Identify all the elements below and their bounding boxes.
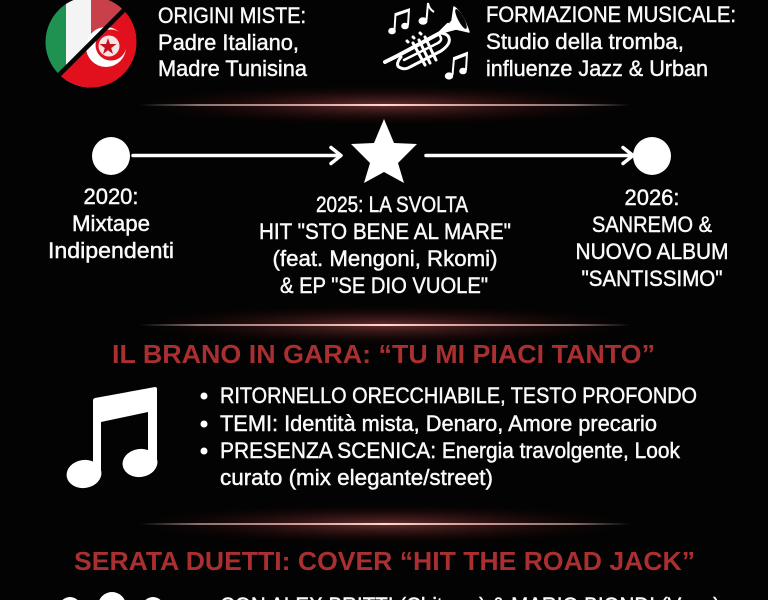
text: origini miste bbox=[158, 3, 308, 81]
timeline text: 2020: 2020: bbox=[84, 184, 138, 209]
text: formazione musicale: FORMAZIONE MUSICALE: bbox=[486, 2, 736, 27]
trumpet body bbox=[385, 7, 469, 69]
text: origini miste: Padre Italiano, bbox=[158, 30, 299, 55]
text: formazione musicale bbox=[486, 2, 736, 81]
divider: lower bbox=[135, 504, 635, 544]
timeline text: 2026: 2026: bbox=[624, 185, 680, 210]
icon: music note bbox=[65, 387, 159, 490]
timeline text: 2025: & EP "SE DIO VUOLE" bbox=[280, 273, 488, 298]
timeline text: 2026: "SANTISSIMO" bbox=[582, 266, 722, 291]
text: formazione musicale: Studio della tromba, bbox=[486, 29, 684, 54]
note left bbox=[388, 10, 409, 34]
timeline node: 2020 bbox=[92, 137, 130, 175]
text: origini miste: ORIGINI MISTE: bbox=[158, 3, 306, 28]
note right bbox=[445, 53, 467, 80]
bullet list: brano: RITORNELLO ORECCHIABILE, TESTO PROFONDO bbox=[220, 383, 697, 408]
timeline text: 2025: (feat. Mengoni, Rkomi) bbox=[272, 246, 498, 271]
divider: middle bbox=[135, 305, 635, 345]
heading: serata duetti: SERATA DUETTI: COVER “HIT THE ROAD JACK” bbox=[74, 546, 695, 576]
bullet list: brano: curato (mix elegante/street) bbox=[220, 465, 493, 490]
icon: trumpet with musical notes bbox=[385, 3, 469, 80]
timeline node: 2026 bbox=[633, 137, 671, 175]
bullet list: brano bbox=[200, 383, 697, 490]
timeline text: 2025: HIT "STO BENE AL MARE" bbox=[259, 219, 511, 244]
timeline text: 2020: Mixtape bbox=[72, 211, 150, 236]
timeline text: 2020: Indipendenti bbox=[48, 238, 174, 263]
divider: top bbox=[135, 85, 635, 125]
heading: il brano in gara: IL BRANO IN GARA: “TU MI PIACI TANTO” bbox=[112, 339, 655, 369]
text: formazione musicale: influenze Jazz & Urban bbox=[486, 56, 708, 81]
timeline text: 2020 bbox=[48, 184, 174, 263]
arrow: 2020 to 2025 bbox=[133, 148, 341, 164]
bullet list: brano: PRESENZA SCENICA: Energia travolgente, Look bbox=[220, 438, 681, 463]
icon: three people bbox=[59, 592, 164, 600]
text: origini miste: Madre Tunisina bbox=[158, 56, 308, 81]
timeline text: 2025 bbox=[259, 192, 511, 298]
note top bbox=[418, 3, 434, 25]
timeline node: star bbox=[351, 119, 417, 183]
timeline text: 2026: NUOVO ALBUM bbox=[576, 239, 728, 264]
timeline bbox=[48, 119, 728, 298]
icon: Italy and Tunisia flag bbox=[46, 0, 136, 88]
timeline text: 2025: 2025: LA SVOLTA bbox=[316, 192, 468, 217]
bullet list: brano: TEMI: Identità mista, Denaro, Amore precario bbox=[220, 411, 657, 436]
arrow: 2025 to 2026 bbox=[426, 148, 633, 164]
timeline text: 2026: SANREMO & bbox=[592, 212, 712, 237]
timeline text: 2026 bbox=[576, 185, 728, 291]
